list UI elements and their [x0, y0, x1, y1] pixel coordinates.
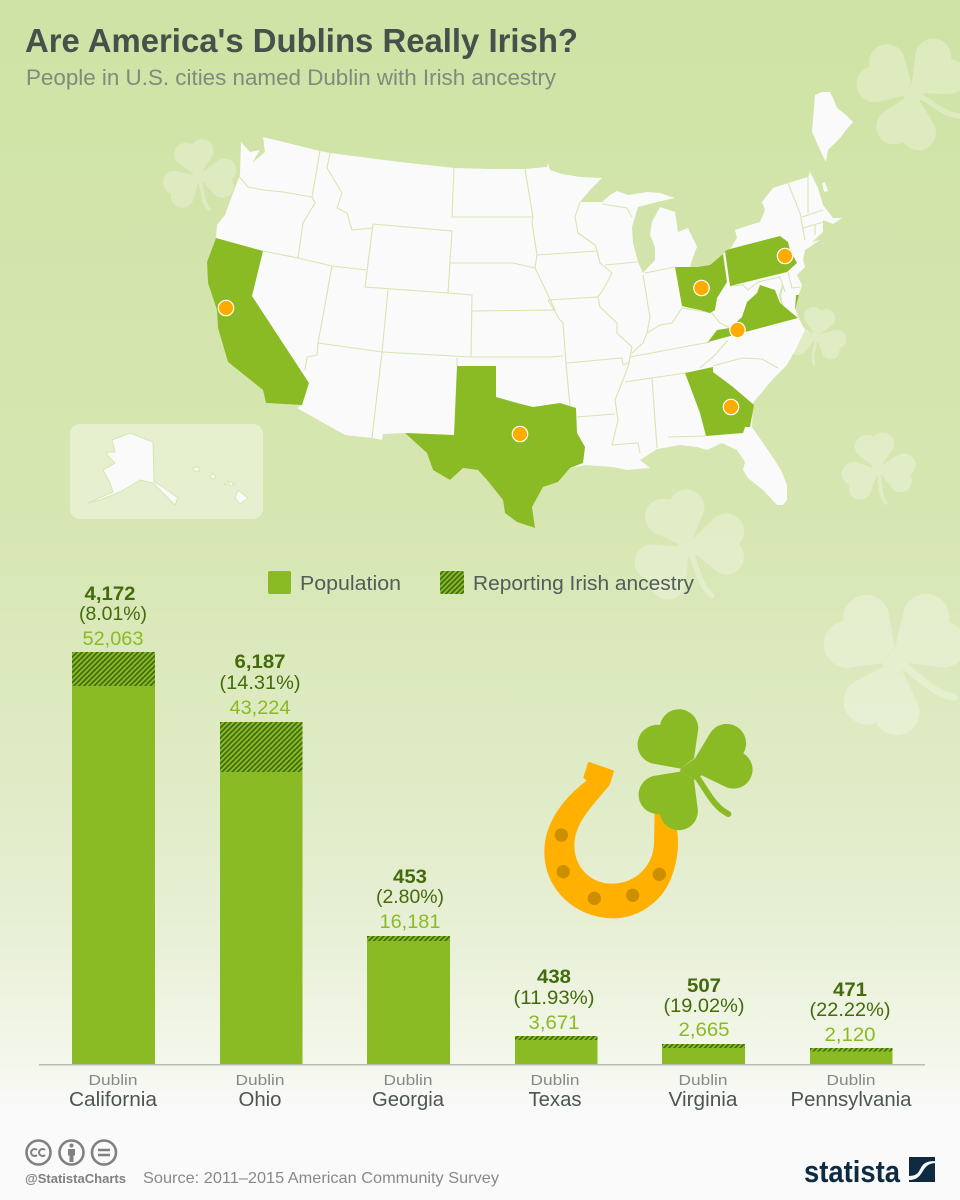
values: Georgia: [376, 867, 444, 933]
bar: California: [72, 652, 155, 1064]
axis labels: Virginia: [668, 1089, 738, 1111]
legend: reporting Irish ancestry: [440, 571, 464, 594]
Dublin markers: [218, 248, 793, 442]
footer: licence icons: [26, 1140, 116, 1164]
values: Ohio: 43,224: [230, 698, 291, 719]
map: contiguous United States: [207, 92, 853, 528]
background shamrocks: [155, 18, 960, 749]
values: California: 52,063: [82, 629, 144, 650]
bar: Georgia: [367, 936, 450, 1064]
values: Pennsylvania: (22.22%): [810, 1000, 890, 1021]
values: Georgia: 453: [393, 867, 427, 888]
axis labels: Ohio: [238, 1089, 282, 1111]
axis labels: California: [69, 1089, 158, 1111]
values: Georgia: 16,181: [380, 912, 440, 933]
values: Virginia: 507: [687, 976, 721, 997]
values: Pennsylvania: 2,120: [824, 1025, 876, 1046]
Georgia: [685, 367, 754, 436]
axis labels: Georgia: [372, 1089, 445, 1111]
values: California: [79, 584, 147, 650]
values: Virginia: 2,665: [678, 1020, 730, 1041]
legend: population: [268, 571, 291, 594]
Maine: [812, 92, 853, 192]
bar: Texas: [515, 1036, 598, 1064]
values: Pennsylvania: [810, 980, 890, 1046]
footer: handle: @StatistaCharts: [25, 1171, 126, 1186]
axis labels: Dublin: [678, 1072, 728, 1089]
Ohio: [675, 254, 727, 313]
legend: [268, 571, 694, 595]
Hawaii: [193, 467, 248, 504]
icon: horseshoe: [545, 763, 677, 917]
inset panel: Alaska and Hawaii: [70, 424, 263, 519]
values: Ohio: 6,187: [234, 652, 286, 673]
values: Texas: [514, 967, 594, 1034]
values: Texas: 3,671: [528, 1013, 580, 1034]
icon: shamrock: [638, 709, 753, 830]
values: Georgia: (2.80%): [376, 887, 444, 908]
values: California: 4,172: [84, 584, 136, 605]
bar: Pennsylvania: [810, 1048, 892, 1064]
axis labels: Dublin: [384, 1072, 432, 1089]
land silhouette: [207, 137, 842, 528]
values: Pennsylvania: 471: [833, 980, 867, 1001]
values: Virginia: [664, 976, 744, 1041]
axis labels: Texas: [528, 1089, 582, 1111]
logo: statista: statista: [804, 1154, 901, 1189]
Alaska: [88, 433, 178, 505]
axis labels: Dublin: [826, 1072, 876, 1089]
subtitle: People in U.S. cities named Dublin with Irish ancestry: [26, 65, 556, 90]
Texas: [405, 366, 585, 528]
axis labels: [69, 1072, 912, 1111]
values: California: (8.01%): [79, 604, 147, 625]
California: [207, 238, 309, 405]
axis labels: Dublin: [530, 1072, 580, 1089]
values: Ohio: (14.31%): [220, 673, 300, 694]
Virginia: [708, 285, 799, 342]
bar chart: [39, 584, 925, 1111]
Pennsylvania: [725, 236, 797, 286]
legend: Reporting Irish ancestry: [473, 573, 694, 595]
axis labels: Dublin: [236, 1072, 284, 1089]
axis labels: Pennsylvania: [790, 1089, 912, 1111]
values: Texas: (11.93%): [514, 988, 594, 1009]
values: Texas: 438: [537, 967, 571, 988]
legend: Population: [300, 573, 401, 595]
bar: Ohio: [220, 722, 302, 1064]
state borders: [238, 151, 823, 453]
title: Are America's Dublins Really Irish?: [25, 22, 578, 59]
values: Ohio: [220, 652, 300, 719]
values: Virginia: (19.02%): [664, 996, 744, 1017]
axis labels: Dublin: [88, 1072, 138, 1089]
footer: source: Source: 2011–2015 American Community Survey: [143, 1170, 499, 1187]
bar: Virginia: [662, 1044, 745, 1064]
